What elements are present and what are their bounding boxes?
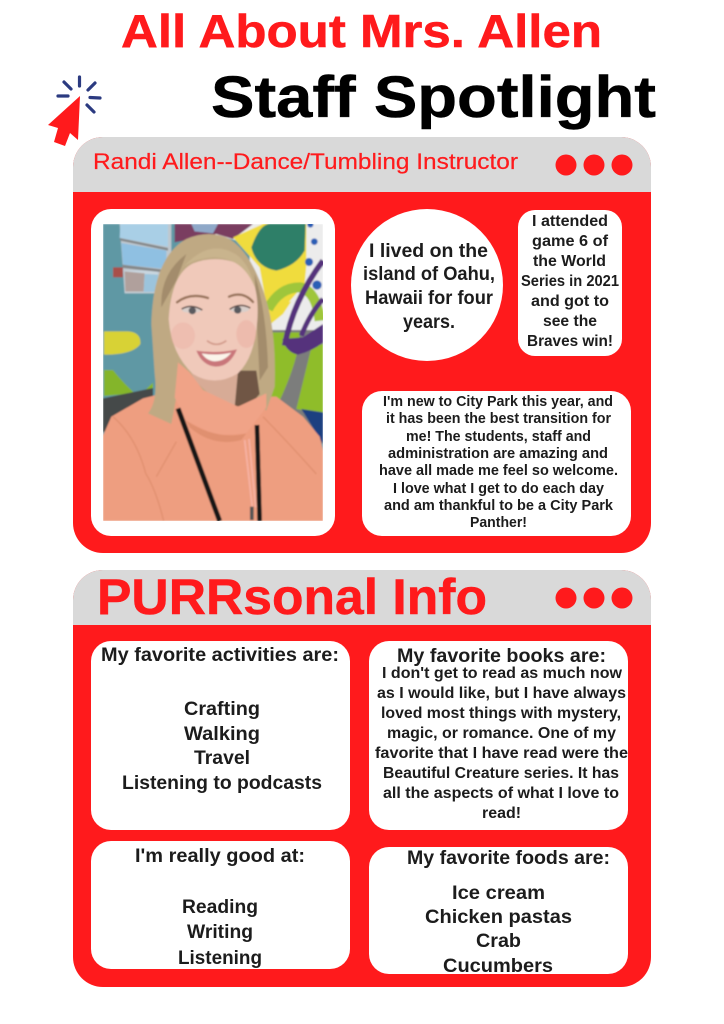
card: favorite activities: [91, 641, 350, 830]
card: favorite books: loved most things with mystery,: [381, 705, 621, 722]
card: favorite books: all the aspects of what I love to: [383, 785, 619, 802]
card: favorite foods: My favorite foods are:: [407, 848, 610, 869]
card: really good at: Reading: [182, 897, 258, 918]
card: really good at: Writing: [187, 922, 253, 943]
card: really good at: I'm really good at:: [135, 846, 305, 867]
panel: PURRsonal info: [73, 569, 651, 987]
circle fact: Hawaii: years.: [403, 312, 455, 333]
card: favorite books: My favorite books are:: [397, 646, 606, 667]
circle fact: Hawaii: I lived on the: [369, 241, 488, 262]
card: new to City Park: administration are amazing and: [388, 446, 608, 462]
card: new to City Park: Panther!: [470, 515, 527, 531]
card: favorite books: as I would like, but I have always: [377, 685, 626, 702]
cowl collar: [174, 362, 267, 410]
card fact: World Series: see the: [543, 313, 597, 330]
card: favorite books: I don't get to read as much now: [382, 665, 623, 682]
panel header bar: [73, 137, 651, 192]
name and role heading: Randi Allen--Dance/Tumbling Instructor: [93, 149, 518, 174]
card: favorite books: read!: [482, 805, 521, 822]
circle fact: Hawaii: island of Oahu,: [363, 264, 495, 285]
card: new to City Park: I'm new to City Park this year, and: [383, 394, 613, 410]
card: new to City Park: have all made me feel so welcome.: [379, 463, 618, 479]
card: favorite foods: Crab: [476, 931, 521, 952]
face: [169, 259, 258, 381]
header dots: [556, 588, 632, 608]
card: new to City Park: and am thankful to be a City Park: [384, 498, 614, 514]
card: favorite foods: Chicken pastas: [425, 907, 572, 928]
card: favorite books: [369, 641, 628, 830]
card fact: World Series: and got to: [531, 293, 609, 310]
photo frame: [91, 209, 335, 536]
card fact: World Series: [518, 210, 622, 356]
card: new to City Park: it has been the best transition for: [386, 411, 611, 427]
card: favorite books: favorite that I have read were the: [375, 745, 628, 762]
lanyard: [178, 408, 220, 521]
hair: [148, 234, 275, 424]
card fact: World Series: I attended: [532, 213, 608, 230]
header dots: [556, 154, 632, 176]
card: favorite activities: Walking: [184, 724, 260, 745]
card fact: World Series: Braves win!: [527, 333, 613, 350]
icon: cursor click: [48, 77, 100, 146]
eyebrows: [177, 295, 253, 302]
sweater: [103, 390, 323, 521]
circle fact: Hawaii: [351, 209, 503, 361]
card: new to City Park: I love what I get to do each day: [393, 481, 604, 497]
subtitle: Staff Spotlight: [211, 65, 656, 130]
card: favorite foods: Cucumbers: [443, 956, 553, 977]
card: really good at: [91, 841, 350, 969]
panel header bar: [73, 570, 651, 625]
card: favorite activities: Travel: [194, 748, 250, 769]
section heading: PURRsonal Info: [97, 569, 487, 625]
card fact: World Series: the World: [533, 253, 606, 270]
circle fact: Hawaii: Hawaii for four: [365, 288, 494, 309]
card: favorite books: magic, or romance. One of my: [387, 725, 616, 742]
card fact: World Series: game 6 of: [532, 233, 609, 250]
photo: smiling woman in peach fleece in front of a mural: [103, 222, 323, 521]
card: favorite activities: Crafting: [184, 699, 260, 720]
card: favorite foods: [369, 847, 628, 977]
card: favorite activities: Listening to podcasts: [122, 773, 322, 794]
sweater seams: [113, 417, 316, 521]
mouth: [196, 349, 237, 367]
card: favorite activities: My favorite activities are:: [101, 645, 339, 666]
eyes: [182, 307, 201, 313]
panel: staff bio: [73, 137, 651, 553]
card: favorite books: Beautiful Creature series. It has: [383, 765, 619, 782]
neck: [192, 373, 238, 406]
card: new to City Park: me! The students, staff and: [406, 429, 591, 445]
card: really good at: Listening: [178, 948, 262, 969]
nose: [207, 341, 226, 344]
card: new to City Park: [362, 391, 631, 536]
card fact: World Series: Series in 2021: [521, 273, 619, 290]
card: favorite foods: Ice cream: [452, 883, 545, 904]
title: All About Mrs. Allen: [121, 5, 602, 57]
